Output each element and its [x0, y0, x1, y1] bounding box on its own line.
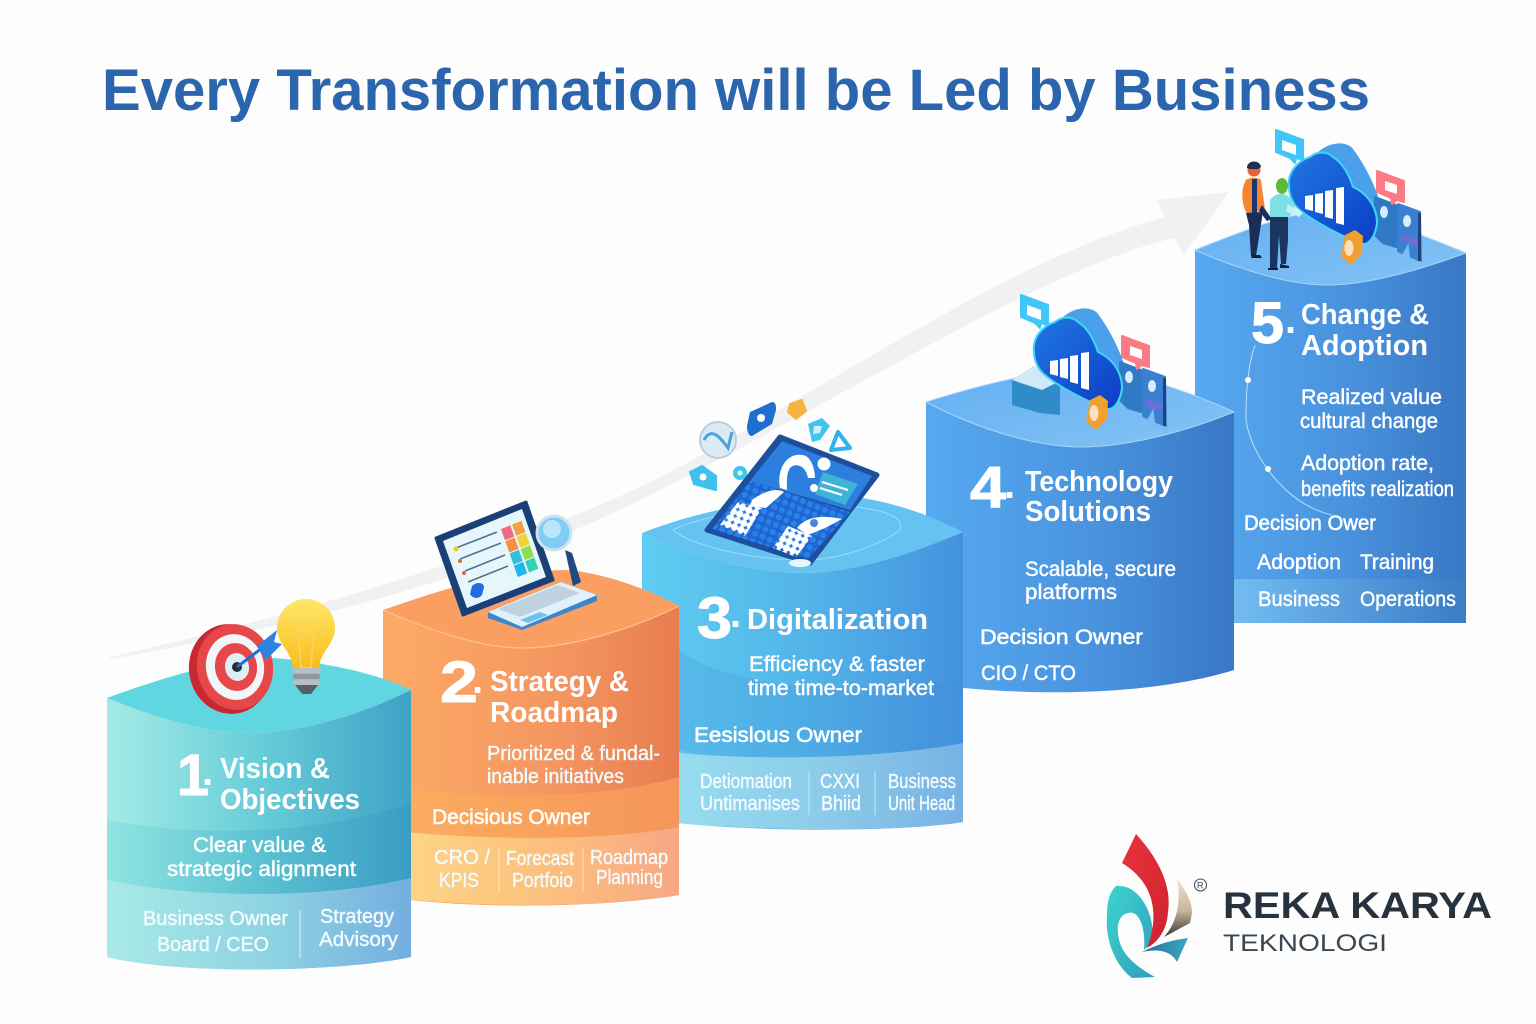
text: owners table: Unit Head — [888, 793, 955, 815]
heading: 4 Technology Solutions — [970, 455, 1173, 528]
icon: logo mark — [1107, 834, 1206, 978]
icon: two business people — [1242, 161, 1302, 270]
text: owners table — [434, 847, 668, 892]
heading: 5 Change and Adoption — [1251, 291, 1429, 362]
text: decision owner: Eesislous Owner — [694, 724, 862, 747]
heading: 1 Vision and Objectives: Vision & — [220, 753, 330, 785]
icon: target with dart — [182, 618, 282, 720]
heading: 5 Change and Adoption: Change & — [1301, 299, 1429, 331]
text: owners table: KPIS — [439, 870, 479, 892]
heading: 5 Change and Adoption: . — [1285, 298, 1296, 342]
text: owners table: Planning — [596, 867, 663, 889]
text: decision owner: Decision Owner — [980, 626, 1143, 649]
heading: 2 Strategy and Roadmap — [440, 650, 629, 729]
text: decision owner — [980, 626, 1143, 685]
text: description: Efficiency & faster — [749, 653, 925, 676]
heading: 1 Vision and Objectives: . — [202, 750, 213, 794]
icon: cloud analytics with server — [1012, 295, 1166, 430]
text: owners table: Roadmap — [590, 847, 668, 869]
text: owners table: Business Owner — [143, 908, 288, 930]
heading: 1 Vision and Objectives — [177, 743, 360, 816]
heading: 5 Change and Adoption: Adoption — [1301, 330, 1428, 362]
icon: logo mark: R — [1197, 880, 1204, 890]
text: description — [167, 834, 356, 881]
text: owners table: Board / CEO — [157, 934, 269, 956]
text: description — [487, 743, 660, 788]
growth arrow — [110, 192, 1229, 659]
icon: laptop with magnifier — [436, 502, 597, 630]
text: decision owner: Decision Ower — [1244, 512, 1376, 535]
heading: 4 Technology Solutions: Solutions — [1025, 496, 1151, 528]
text: description: strategic alignment — [167, 858, 356, 881]
text: owners table: Training — [1360, 551, 1434, 574]
text: outcomes: cultural change — [1300, 410, 1438, 433]
panel: step 5 change and adoption — [1195, 130, 1466, 623]
heading: 3 Digitalization: . — [730, 592, 741, 636]
text: decision owner: Decisious Owner — [432, 806, 590, 829]
text: owners table: Detiomation — [700, 771, 792, 793]
icon: light bulb — [277, 599, 335, 694]
text: owners table: Untimanises — [700, 793, 800, 815]
heading: 1 Vision and Objectives: Objectives — [220, 784, 360, 816]
title: Every Transformation will be Led by Business — [102, 58, 1370, 123]
text: owners table: Strategy — [320, 906, 394, 928]
heading: 3 Digitalization: Digitalization — [747, 604, 928, 636]
text: description — [748, 653, 934, 700]
heading: 2 Strategy and Roadmap: Strategy & — [490, 666, 629, 698]
text: description: Prioritized & fundal- — [487, 743, 660, 765]
panel: step 3 digitalization — [642, 400, 963, 830]
text: owners table: Advisory — [319, 929, 398, 951]
heading: 5 Change and Adoption: 5 — [1251, 291, 1284, 356]
text: owners table: CRO / — [434, 847, 490, 869]
heading: 2 Strategy and Roadmap: 2 — [440, 650, 478, 715]
panel: step 4 technology solutions — [926, 295, 1234, 692]
heading: 3 Digitalization — [697, 586, 928, 651]
text: outcomes — [1300, 386, 1454, 501]
text: owners table: Portfoio — [512, 870, 573, 892]
text: description: inable initiatives — [487, 766, 624, 788]
text: company name: REKA KARYA — [1223, 885, 1492, 926]
text: owners table: Bhiid — [821, 793, 861, 815]
heading: 2 Strategy and Roadmap: Roadmap — [490, 697, 618, 729]
heading: 1 Vision and Objectives: 1 — [177, 743, 209, 808]
text: owners table — [143, 906, 398, 958]
heading: 2 Strategy and Roadmap: . — [472, 658, 483, 702]
panel: step 1 vision and objectives — [107, 599, 411, 969]
text: company subtitle: TEKNOLOGI — [1223, 930, 1387, 957]
text: owners table: Forecast — [506, 848, 574, 870]
text: description: Scalable, secure — [1025, 558, 1176, 581]
heading: 3 Digitalization: 3 — [697, 586, 732, 651]
text: description — [1025, 558, 1176, 604]
text: owners table: Operations — [1360, 588, 1456, 611]
text: owners table — [700, 771, 956, 815]
heading: 4 Technology Solutions: . — [1004, 463, 1015, 507]
text: outcomes: Realized value — [1301, 386, 1442, 409]
icon: foldable tablet with floating icons — [690, 400, 877, 567]
text: description: platforms — [1025, 581, 1117, 604]
heading: 4 Technology Solutions: 4 — [970, 455, 1006, 520]
text: owners table — [1257, 551, 1456, 611]
logo: Reka Karya Teknologi — [1107, 834, 1492, 978]
text: owners table: Business — [888, 771, 956, 793]
text: owners table: Business — [1258, 588, 1340, 611]
icon: cloud analytics with bubbles — [1276, 130, 1421, 265]
text: decision owner: CIO / CTO — [981, 662, 1076, 685]
text: owners table: Adoption — [1257, 551, 1341, 574]
text: outcomes: benefits realization — [1301, 478, 1454, 501]
text: owners table: CXXI — [820, 771, 860, 793]
text: description: Clear value & — [193, 834, 326, 857]
text: description: time time-to-market — [748, 677, 934, 700]
text: outcomes: Adoption rate, — [1301, 452, 1434, 475]
heading: 4 Technology Solutions: Technology — [1025, 466, 1173, 498]
panel: step 2 strategy and roadmap — [383, 502, 679, 905]
